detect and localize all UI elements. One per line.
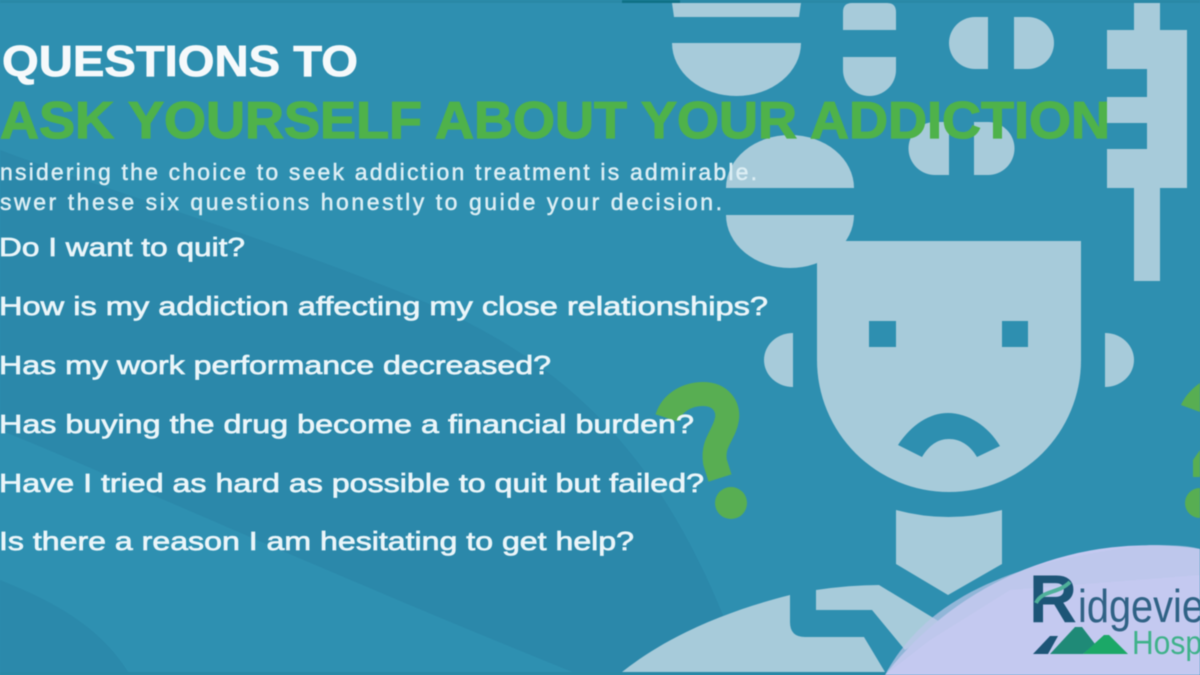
logo letter R: R (1029, 561, 1077, 637)
intro text (0, 159, 757, 215)
question 3: Has my work performance decreased? (0, 350, 551, 380)
question mark right (1181, 383, 1200, 518)
logo: Ridgeview Hospital (1029, 561, 1200, 661)
question mark left (667, 394, 747, 519)
head (817, 241, 1081, 492)
question 1: Do I want to quit? (0, 232, 245, 262)
right eye (1002, 321, 1028, 347)
question list (0, 232, 768, 556)
heading green: ASK YOURSELF ABOUT YOUR ADDICTION (0, 92, 1110, 150)
icon: round pill top (672, 3, 801, 96)
globe badge (885, 545, 1200, 675)
logo swoosh (1036, 582, 1070, 603)
intro text: swer these six questions honestly to guide your decision. (0, 189, 722, 215)
question 5: Have I tried as hard as possible to quit but failed? (0, 468, 704, 498)
icon: split pill lower (908, 122, 1014, 175)
sad mouth (898, 413, 1000, 457)
icon: syringe (1107, 3, 1187, 281)
left ear (764, 333, 793, 387)
question 2: How is my addiction affecting my close relationships? (0, 291, 768, 321)
icon: split pill upper (949, 17, 1054, 69)
icon: capsule (843, 3, 896, 96)
shoulders (622, 595, 885, 672)
intro text: nsidering the choice to seek addiction treatment is admirable. (0, 159, 757, 185)
question 6: Is there a reason I am hesitating to get help? (0, 526, 634, 556)
illustration: worried person (622, 241, 1134, 672)
logo mountains (1033, 627, 1128, 654)
collar (816, 585, 945, 650)
illustration: floating pills and syringe (672, 3, 1187, 281)
neck (896, 510, 1002, 595)
right ear (1105, 333, 1134, 387)
left eye (869, 321, 896, 347)
icon: large round pill (726, 135, 854, 268)
question 4: Has buying the drug become a financial burden? (0, 409, 694, 439)
title: QUESTIONS TO (2, 37, 358, 86)
